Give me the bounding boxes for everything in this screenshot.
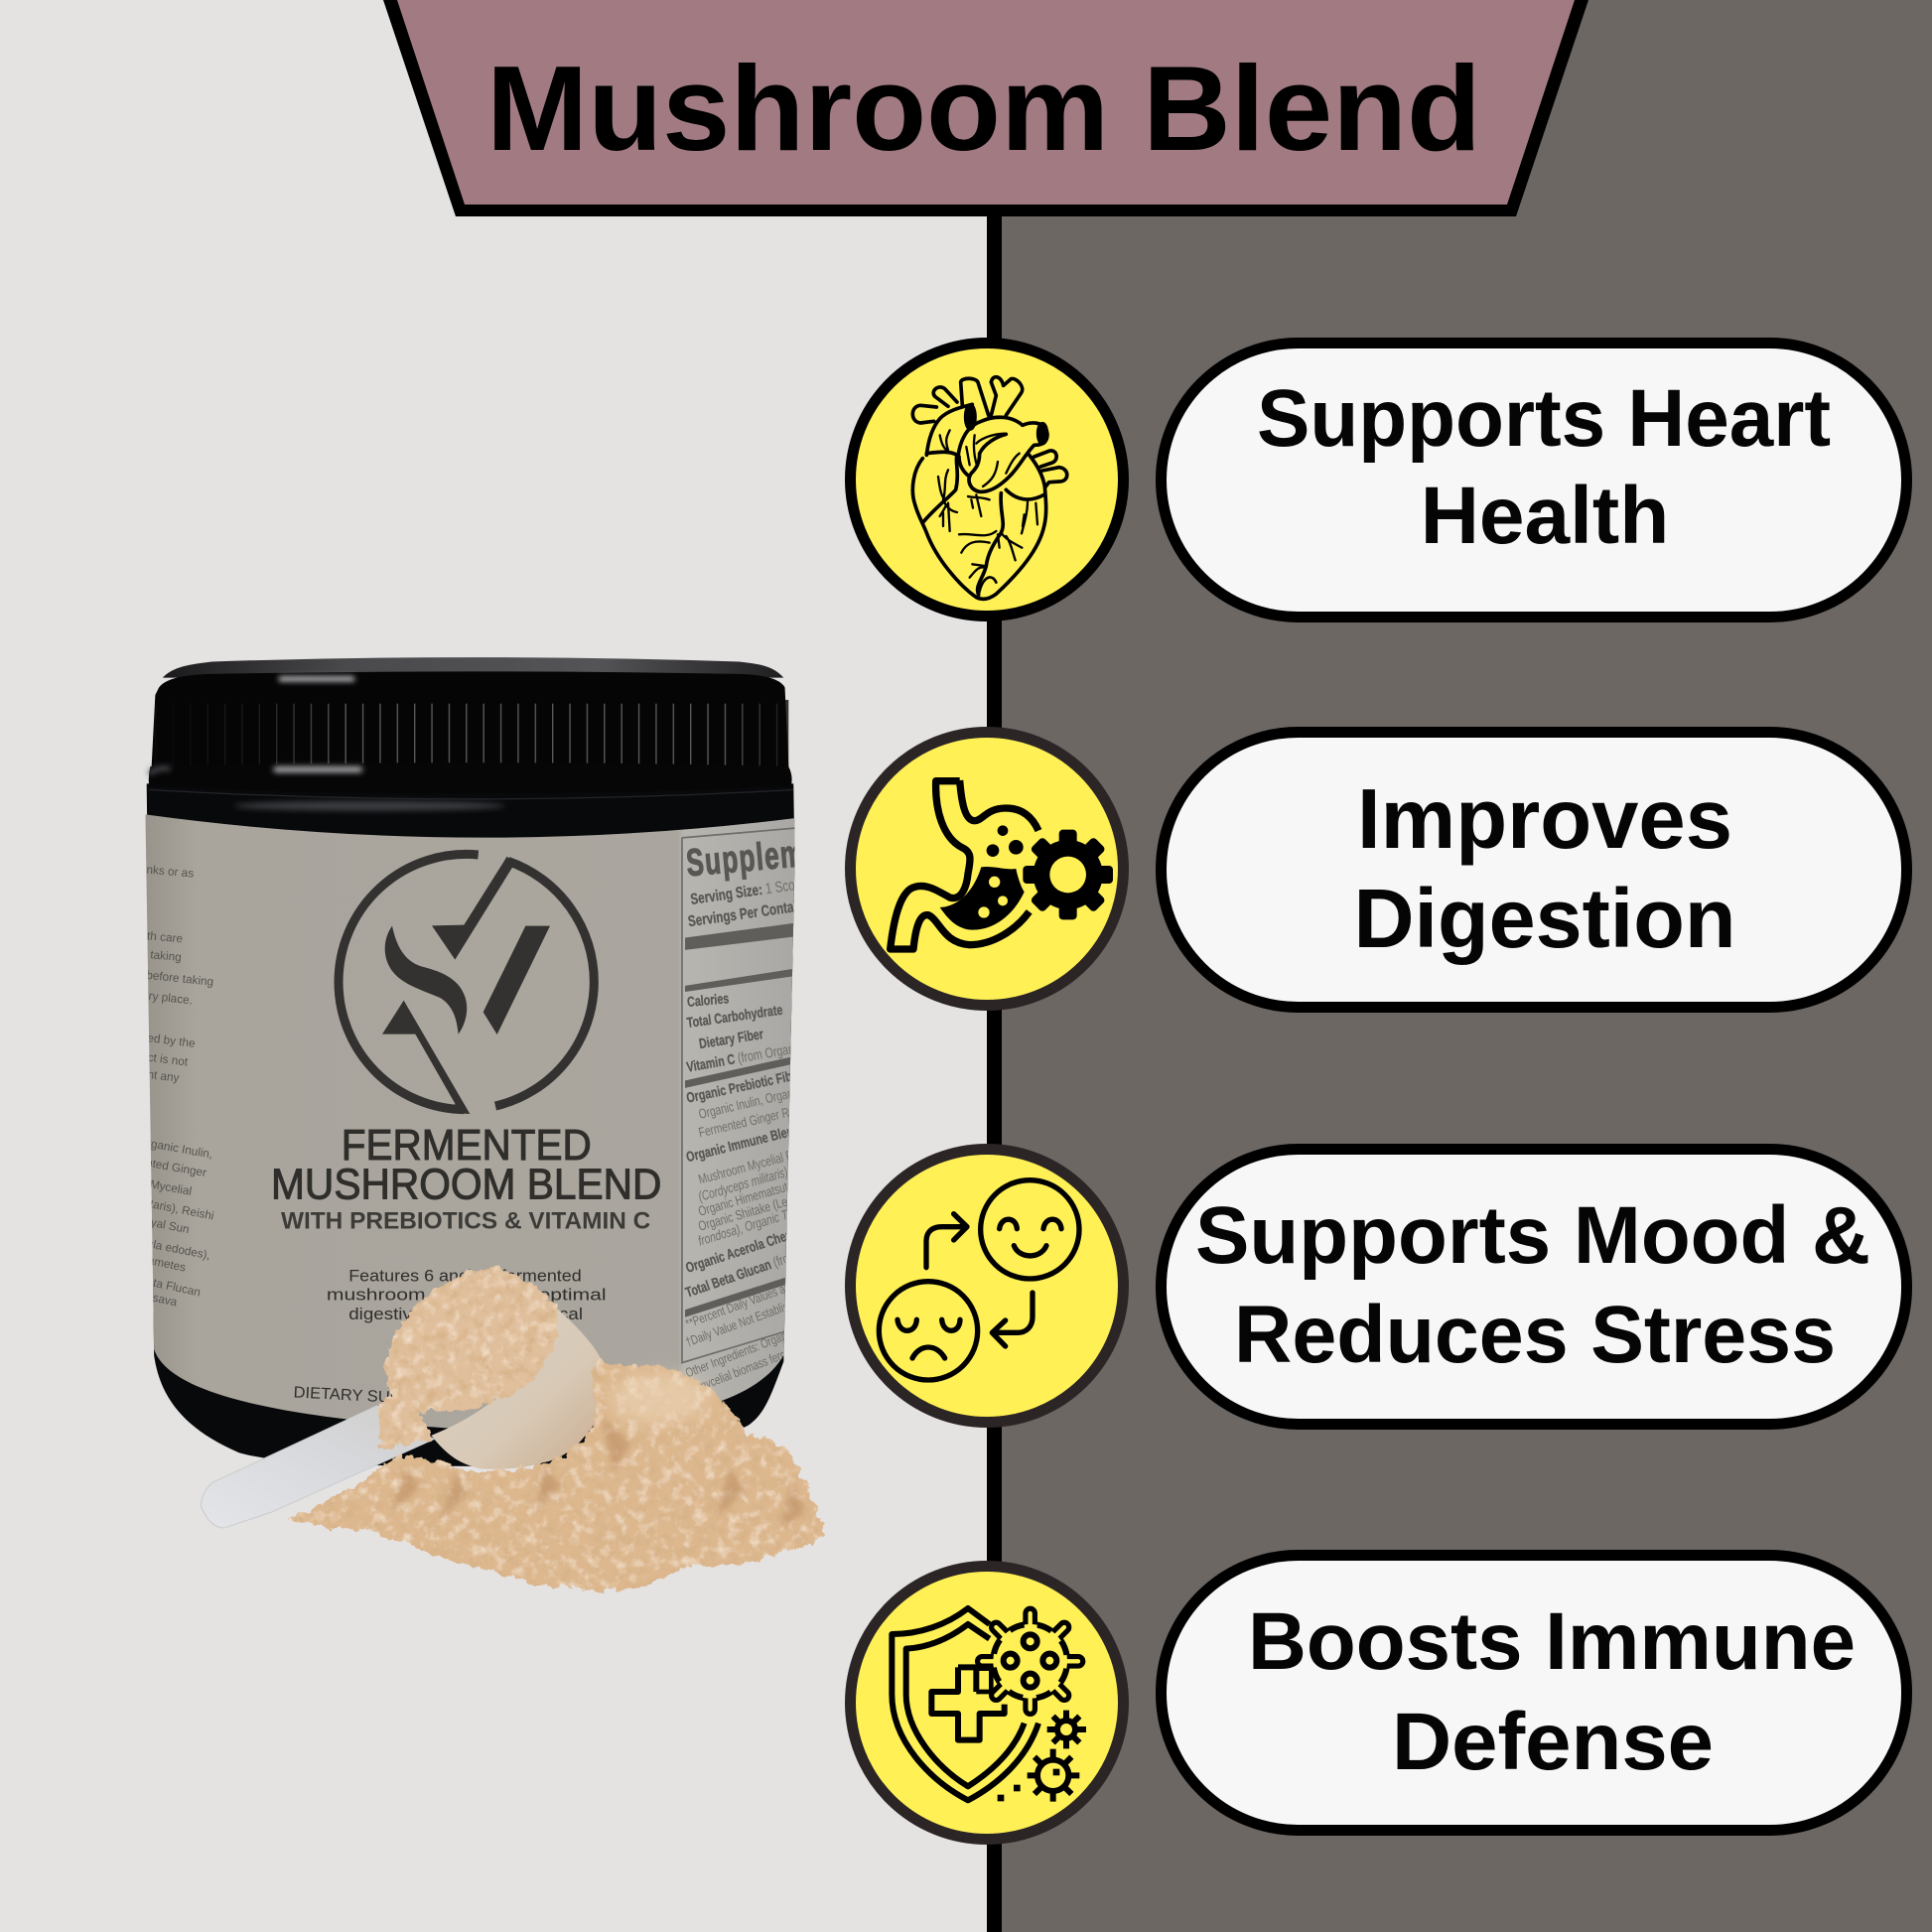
supplement facts panel: frondosa), Organic Turkey [696,1199,814,1249]
label left side small text: ake (Royal Sun [109,1208,191,1236]
powder mound in scoop [377,1267,557,1449]
title: Mushroom Blend [486,41,1481,176]
label left side small text: your health care [98,925,184,945]
label left side small text: conditions, before taking [86,963,214,989]
pile shadows [392,1417,806,1528]
benefit pill 2 [1162,733,1906,1007]
supplement facts panel: Fermented Ginger Root [697,1101,805,1141]
supplement facts panel: Organic Prebiotic Fiber Blend [685,1059,835,1106]
powder pile [288,1360,824,1590]
icon 1: heart [850,344,1124,616]
label left side small text: Black, Cassava [96,1280,179,1310]
icon 3: mood change faces [850,1150,1124,1422]
supplement facts panel: Organic Inulin, Organic Ginger [697,1076,834,1122]
label product name: FERMENTED [342,1122,592,1170]
supplement facts panel: Dietary Fiber [698,1027,764,1052]
label left side small text: rkey Tail (Trametes [87,1241,187,1275]
benefit pill 3 [1162,1150,1906,1424]
benefit pill 3: Reduces Stress [1234,1290,1836,1380]
label left side small text [146,865,214,1307]
supplement facts panel: Servings Per Container 30 [687,894,832,930]
label left side small text: in a cool, dry place. [91,984,194,1007]
benefit pill 4 [1162,1555,1906,1831]
heart drawing [912,377,1067,599]
supplement facts panel: Vitamin C (from Organic Acerola) [685,1033,844,1075]
supplement facts panel: Supplement Facts [684,820,931,885]
pill text: Supports Mood & [1195,1190,1870,1281]
supplement facts panel: Organic Shiitake (Lentinula [696,1185,818,1234]
label left side small text: Blend (Organic Inulin, [100,1129,213,1162]
supplement facts panel [681,827,794,1387]
label left side small text: Total Beta Flucan [110,1268,202,1300]
label product name: Features 6 ancient fermented [348,1267,582,1286]
icon 2: stomach and gear [850,733,1124,1005]
small germ bottom [1028,1749,1079,1802]
supplement facts panel: Total Carbohydrate [686,1002,783,1031]
label product name [271,1122,661,1411]
jar lid [149,657,793,799]
central vertical connector line [987,199,1002,1932]
label left side small text: evaluated by the [109,1027,197,1050]
small germ top [1047,1711,1086,1748]
benefit pill 1: Health [1421,471,1669,561]
jar body [147,778,794,1466]
virus [982,1613,1078,1710]
supplement facts panel: Mushroom Mycelial Ferment [697,1139,825,1187]
pill text: Improves [1357,772,1732,867]
scoop handle [201,1406,434,1528]
label product name: digestive and immunological [348,1305,583,1323]
label product name: DIETARY SUPPLEMENT [293,1383,479,1411]
supplement facts panel: **Percent Daily Values are Based [684,1270,824,1331]
supplement facts panel: (Cordyceps militaris), Organic [696,1153,829,1204]
icon 4: shield and virus [850,1567,1124,1839]
title banner [383,0,1588,216]
supplement facts panel: Organic Acerola Cherry Extract [684,1212,839,1276]
label left side small text: se in food or drinks or as [66,856,195,881]
benefit pill 2: Digestion [1354,872,1735,965]
gear [1023,830,1113,919]
label product name: mushroom species for optimal [327,1285,607,1304]
background: right dark panel [994,0,1932,1932]
background: left light panel [0,0,994,1932]
supplement facts panel: Calories [686,991,730,1010]
supplement facts panel: mycelial biomass fermented [696,1338,813,1394]
label left side small text: nursing, taking [105,944,182,964]
product: jar with powder and scoop [145,657,825,1593]
scoop bowl [431,1308,607,1469]
label left side small text: Mushroom Mycelial [91,1168,193,1198]
label left side small text: or prevent any [104,1063,180,1085]
label product name: WITH PREBIOTICS & VITAMIN C [281,1207,650,1233]
label product name: MUSHROOM BLEND [271,1162,661,1209]
supplement facts panel: Total Beta Glucan (from 12%) [683,1239,826,1301]
label logo [339,854,594,1114]
benefit pill 1 [1162,344,1906,618]
label left side small text: ceps militaris), Reishi [104,1189,215,1223]
stomach drawing [891,780,1113,949]
shield drawing [892,1608,1086,1802]
jar label [145,814,794,1430]
supplement facts panel: †Daily Value Not Established [684,1295,805,1350]
supplement facts panel: Other Ingredients: Organic Gluten [684,1316,824,1381]
pill text: Boosts Immune [1248,1596,1856,1687]
label left side small text: This product is not [92,1044,190,1069]
pill text: Supports Heart [1257,373,1831,464]
label left side small text: Fermented Ginger [112,1151,207,1179]
label left side small text: Lentinula edodes), [114,1231,211,1262]
supplement facts panel: Serving Size: 1 Scoop (7g) [689,872,832,907]
supplement facts panel: Organic Immune Blend [685,1122,801,1166]
benefit pill 4: Defense [1392,1697,1714,1787]
faces drawing [879,1180,1079,1380]
supplement facts panel: Organic Himematsutake [696,1174,806,1219]
